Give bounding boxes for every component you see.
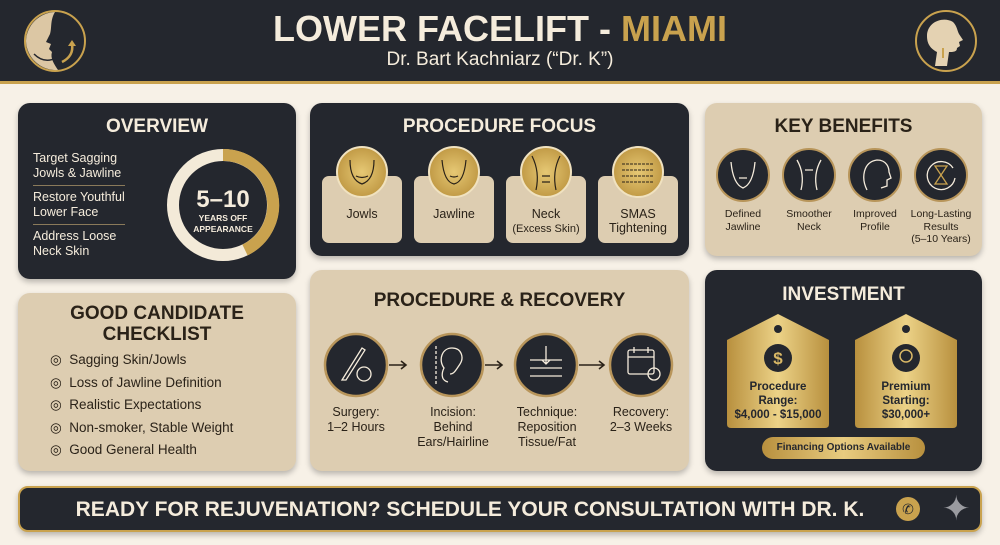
icon: phone: ✆ — [902, 501, 914, 517]
panel: investment — [705, 270, 982, 471]
benefit icons: Long-Lasting — [911, 208, 971, 220]
price tags: Procedure — [750, 381, 806, 393]
ring stat — [167, 149, 280, 261]
price tags — [727, 314, 957, 428]
overview list: Lower Face — [33, 205, 98, 219]
checklist items: ◎ Non-smoker, Stable Weight — [50, 420, 233, 435]
overview list: Jowls & Jawline — [33, 166, 121, 180]
checklist items: ◎ Loss of Jawline Definition — [50, 375, 222, 390]
checklist items — [50, 352, 234, 457]
checklist items: ◎ Realistic Expectations — [50, 397, 201, 412]
benefit icons: Neck — [797, 220, 821, 232]
heading: overview: OVERVIEW — [106, 116, 208, 137]
overview list — [33, 151, 125, 258]
overview list: Neck Skin — [33, 244, 89, 258]
panel: key benefits — [705, 103, 982, 256]
financing pill — [762, 437, 925, 459]
checklist items: ◎ Sagging Skin/Jowls — [50, 352, 186, 367]
price tags: Range: — [759, 395, 797, 407]
ring stat: APPEARANCE — [193, 224, 253, 234]
benefit icons: (5–10 Years) — [911, 233, 971, 245]
heading: key benefits: KEY BENEFITS — [775, 116, 912, 137]
subtitle: Dr. Bart Kachniarz (“Dr. K”) — [386, 49, 614, 70]
panel: good candidate checklist — [18, 293, 296, 471]
focus card: smas: SMAS — [620, 207, 656, 221]
benefit icons: Results — [923, 220, 958, 232]
icon: profile right — [915, 10, 977, 72]
panel: procedure focus — [310, 103, 689, 256]
CTA banner — [18, 486, 982, 532]
benefit icons — [716, 148, 971, 245]
icon: sparkle: ✦ — [942, 490, 970, 528]
CTA banner: READY FOR REJUVENATION? SCHEDULE YOUR CONSULTATION WITH DR. K. — [76, 498, 864, 521]
focus card: smas — [598, 146, 678, 243]
header bar — [0, 0, 1000, 84]
focus card: jowls: Jowls — [346, 207, 378, 221]
benefit icons: Profile — [860, 220, 890, 232]
overview list: Restore Youthful — [33, 190, 125, 204]
step labels: Surgery: — [332, 405, 380, 419]
financing pill: Financing Options Available — [777, 442, 910, 453]
heading: checklist: GOOD CANDIDATE — [70, 303, 244, 324]
heading: checklist: CHECKLIST — [103, 324, 211, 345]
overview list: Target Sagging — [33, 151, 117, 165]
benefit icons: Defined — [725, 208, 761, 220]
heading: checklist — [70, 303, 244, 345]
heading: procedure focus: PROCEDURE FOCUS — [403, 116, 596, 137]
price tags: Premium — [881, 381, 931, 393]
price tags: Starting: — [882, 395, 930, 407]
ring stat: 5–10 — [196, 186, 250, 213]
icon: face lift left — [24, 10, 86, 72]
focus card: neck — [506, 146, 586, 243]
panel: procedure & recovery: Reposition — [517, 420, 577, 434]
heading: procedure & recovery: PROCEDURE & RECOVERY — [374, 290, 625, 311]
benefit icons: Smoother — [786, 208, 832, 220]
focus card: smas: Tightening — [609, 221, 667, 235]
price tags: $ — [773, 349, 783, 368]
benefit icons: Jawline — [725, 220, 761, 232]
focus card: neck: (Excess Skin) — [512, 223, 580, 235]
price tags: $4,000 - $15,000 — [735, 409, 821, 421]
checklist items: ◎ Good General Health — [50, 442, 197, 457]
panel: procedure & recovery: Recovery: — [613, 405, 669, 419]
steps — [324, 332, 674, 398]
ring stat: YEARS OFF — [199, 213, 247, 223]
panel: procedure & recovery: Ears/Hairline — [417, 435, 489, 449]
benefit icons: Improved — [853, 208, 897, 220]
heading: investment: INVESTMENT — [782, 284, 905, 305]
panel: procedure & recovery: 2–3 Weeks — [610, 420, 672, 434]
overview list: Address Loose — [33, 229, 116, 243]
panel: procedure & recovery: Behind — [434, 420, 472, 434]
step labels: 1–2 Hours — [327, 420, 385, 434]
panel: procedure & recovery: Tissue/Fat — [518, 435, 576, 449]
panel: procedure & recovery — [310, 270, 689, 471]
price tags: $30,000+ — [882, 409, 930, 421]
panel: procedure & recovery: Incision: — [430, 405, 476, 419]
focus card: jawline: Jawline — [433, 207, 475, 221]
title: LOWER FACELIFT - MIAMI — [273, 8, 727, 49]
icon: phone — [896, 497, 920, 521]
step labels — [327, 405, 385, 434]
panel: procedure & recovery: Technique: — [517, 405, 577, 419]
focus card: jowls — [322, 146, 402, 243]
focus card: neck: Neck — [532, 207, 560, 221]
focus card: jawline — [414, 146, 494, 243]
panel: overview — [18, 103, 296, 279]
